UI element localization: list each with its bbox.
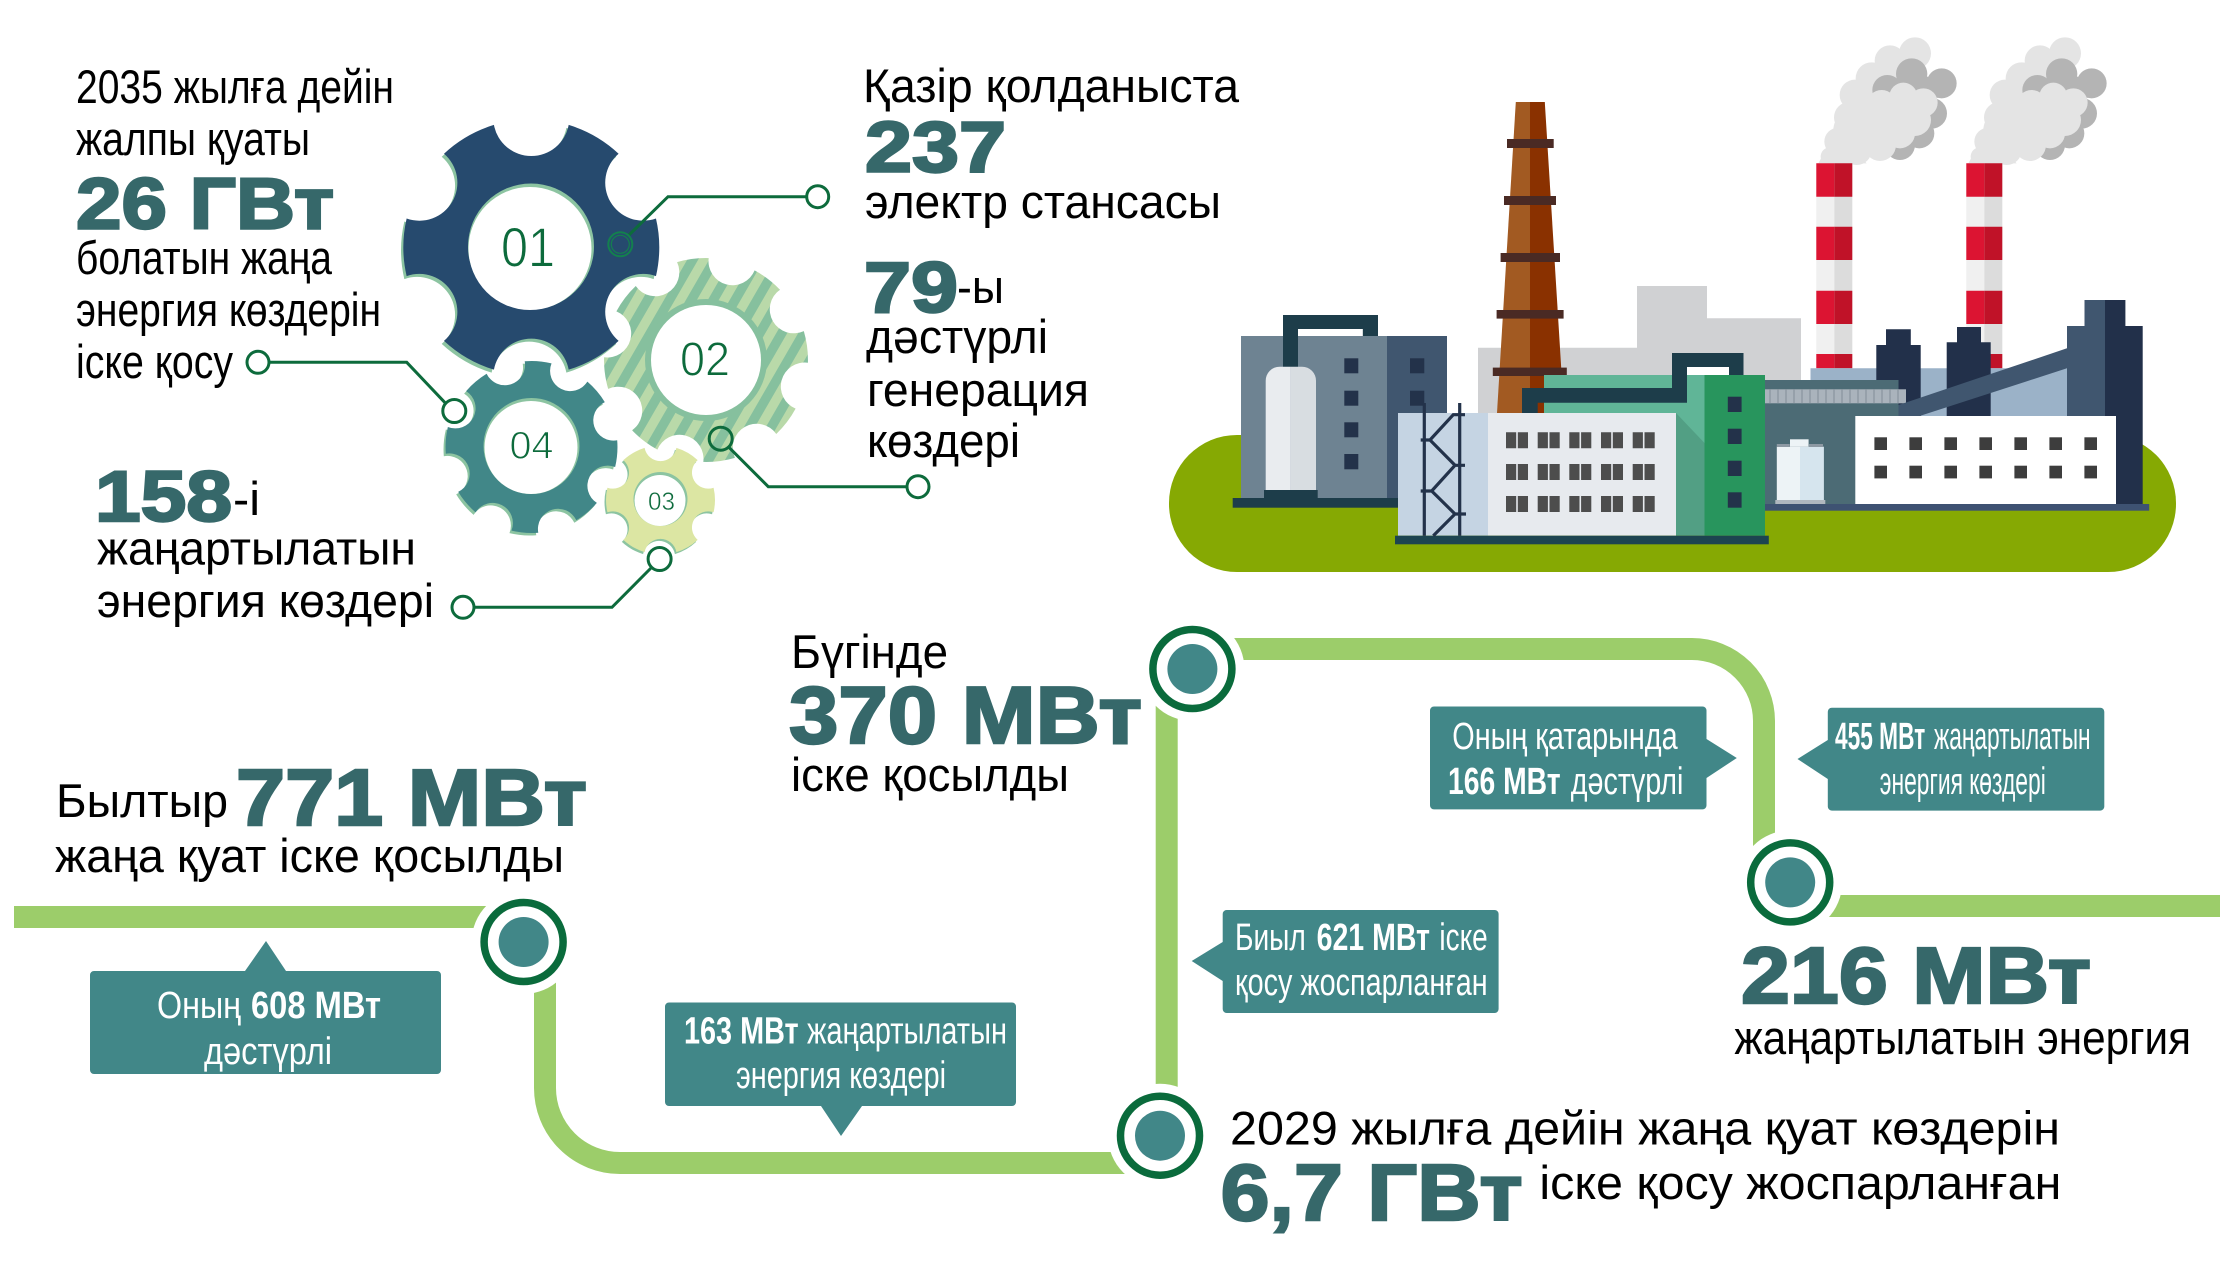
text: 26 GW target [76, 60, 394, 388]
callout: 166 MW traditional: Оның қатарында [1452, 716, 1678, 758]
callout: 608 MW traditional: дәстүрлі [204, 1031, 332, 1073]
connector: gear 04 to 26 GVt [247, 351, 469, 426]
text: 216 MW renewable: 216 МВт [1741, 931, 2091, 1020]
callout: 163 MW renewable: энергия көздері [736, 1055, 946, 1097]
text: 216 MW renewable [1734, 931, 2191, 1064]
text: 237 power plants: Қазір қолданыста [863, 59, 1240, 112]
text: 158 renewable: энергия көздері [97, 574, 434, 627]
gear 03 [605, 448, 715, 554]
background grey buildings [1478, 286, 1801, 430]
gear 01 [401, 125, 659, 373]
timeline node 4 [1738, 830, 1842, 934]
illustration: power plant [1169, 37, 2176, 572]
callout: 621 MW planned: іске [1439, 917, 1488, 959]
gear 02 [585, 239, 827, 481]
callout: 608 MW traditional [90, 941, 441, 1074]
callout: 166 MW traditional: дәстүрлі [1571, 761, 1683, 803]
smoke and striped chimney left [1816, 37, 1957, 368]
text: 79 traditional: генерация [867, 363, 1089, 416]
callout: 608 MW traditional: 608 МВт [251, 985, 381, 1027]
callout: 608 MW traditional: Оның [157, 985, 241, 1027]
callout: 455 MW renewable [1798, 708, 2104, 811]
timeline node 3 [1140, 617, 1244, 721]
text: last year 771 MW [55, 753, 587, 882]
timeline path [14, 649, 2220, 1163]
gear 04 [424, 342, 637, 555]
text: 237 power plants: электр стансасы [865, 175, 1221, 228]
smoke and striped chimney right [1966, 37, 2107, 368]
text: today 370 MW: 370 МВт [789, 671, 1142, 761]
callout: 621 MW planned: қосу жоспарланған [1235, 962, 1488, 1004]
callout: 166 MW traditional: 166 МВт [1448, 761, 1561, 803]
callout: 163 MW renewable: 163 МВт [684, 1010, 799, 1052]
timeline node 1 [472, 890, 576, 994]
text: 26 GW target: энергия көздерін [76, 283, 381, 336]
text: 6.7 GW by 2029: 2029 жылға дейін жаңа қуат көздерін [1230, 1102, 2060, 1154]
text: 237 power plants: 237 [865, 108, 1006, 187]
text: 158 renewable: жаңартылатын [97, 522, 416, 574]
gear 04: 04 [510, 424, 554, 468]
text: 26 GW target: жалпы қуаты [76, 112, 310, 165]
gear 01: 01 [501, 216, 555, 278]
left grey building with tank [1233, 315, 1447, 508]
callout: 621 MW planned [1192, 910, 1499, 1013]
gears cluster [401, 125, 827, 555]
timeline node 2 [1108, 1084, 1212, 1188]
text: 158 renewable [95, 458, 434, 627]
callout: 163 MW renewable [665, 1002, 1016, 1136]
text: 26 GW target: іске қосу [76, 335, 233, 388]
text: 26 GW target: 2035 жылға дейін [76, 60, 394, 113]
text: last year 771 MW: жаңа қуат іске қосылды [55, 829, 564, 882]
callout: 166 MW traditional [1430, 706, 1737, 809]
text: 6.7 GW by 2029: 6,7 ГВт [1221, 1148, 1523, 1237]
text: 216 MW renewable: жаңартылатын энергия [1734, 1011, 2191, 1064]
callout: 621 MW planned: 621 МВт [1317, 917, 1430, 959]
text: last year 771 MW: 771 МВт [236, 753, 587, 842]
text: 237 power plants [863, 59, 1240, 228]
text: today 370 MW: Бүгінде [791, 625, 948, 678]
text: 79 traditional: 79 [864, 249, 958, 328]
text: 158 renewable: -і [233, 472, 260, 525]
connector: gear 03 to 158 [452, 544, 675, 618]
callout: 455 MW renewable: 455 МВт [1835, 716, 1925, 758]
text: 26 GW target: болатын жаңа [76, 231, 333, 284]
gear 03: 03 [648, 488, 675, 516]
gear 02: 02 [680, 334, 730, 386]
text: 158 renewable: 158 [95, 458, 232, 537]
connector: gear 02 to 79 [709, 427, 929, 498]
brown chimney [1493, 102, 1567, 413]
text: 79 traditional: көздері [867, 414, 1020, 467]
text: 79 traditional: дәстүрлі [866, 310, 1048, 363]
connector: gear 01 to 237 [608, 186, 829, 256]
callout: 621 MW planned: Биыл [1235, 917, 1306, 959]
callout: 163 MW renewable: жаңартылатын [807, 1010, 1007, 1052]
text: 79 traditional [864, 249, 1089, 467]
text: 6.7 GW by 2029 [1221, 1102, 2061, 1237]
text: 79 traditional: -ы [957, 260, 1004, 313]
text: today 370 MW [789, 625, 1142, 801]
text: today 370 MW: іске қосылды [791, 748, 1069, 801]
right complex [1765, 300, 2149, 511]
callout: 455 MW renewable: энергия көздері [1880, 761, 2046, 803]
text: last year 771 MW: Былтыр [56, 774, 228, 827]
green ground [1169, 435, 2176, 572]
callout: 455 MW renewable: жаңартылатын [1934, 716, 2091, 758]
text: 6.7 GW by 2029: іске қосу жоспарланған [1539, 1156, 2061, 1209]
text: 26 GW target: 26 ГВт [76, 164, 334, 244]
centre green and white building [1395, 353, 1769, 544]
